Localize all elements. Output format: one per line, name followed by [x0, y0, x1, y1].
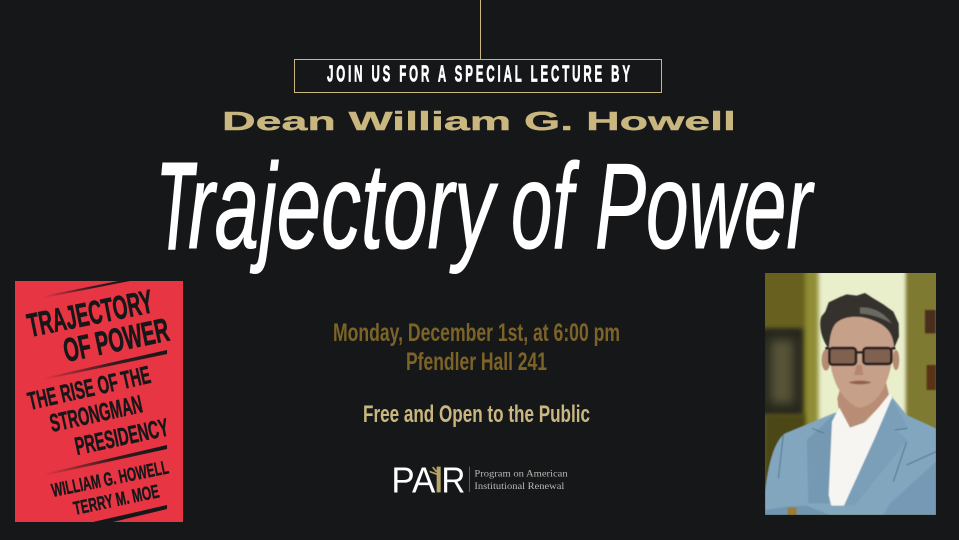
PAIR logo [391, 459, 568, 500]
jacket [765, 397, 936, 515]
PAIR logo: Program on American [474, 469, 568, 479]
book subtitle: THE RISE OF THE [25, 361, 153, 416]
jacket creases [778, 428, 936, 482]
right sleeve [883, 462, 936, 515]
book authors: TERRY M. MOE [72, 481, 161, 520]
connector line [480, 0, 481, 59]
banner: join us [294, 60, 662, 92]
mouth [848, 381, 872, 384]
glasses [825, 348, 895, 365]
book title: OF POWER [60, 311, 172, 369]
title: rajectory [188, 138, 499, 274]
admission note: Free and Open to the Public [363, 401, 590, 428]
book authors [50, 457, 171, 520]
folded arm [765, 506, 830, 515]
book authors: WILLIAM G. HOWELL [50, 457, 171, 502]
banner: join us: JOIN US FOR A SPECIAL LECTURE BY [327, 61, 630, 87]
title: Power [595, 138, 815, 274]
PAIR logo: R [441, 459, 465, 500]
speaker name: Dean William G. Howell [222, 106, 736, 136]
PAIR logo: Institutional Renewal [474, 481, 565, 491]
icon: gold tree [429, 467, 441, 492]
book subtitle [25, 361, 171, 461]
event location: Pfendler Hall 241 [406, 348, 547, 376]
event date and time: Monday, December 1st, at 6:00 pm [333, 319, 620, 347]
book subtitle: STRONGMAN [47, 390, 145, 438]
ears [822, 349, 830, 371]
nose shadow [854, 365, 863, 375]
hair [820, 293, 899, 348]
neck [837, 378, 889, 428]
book rules [43, 281, 167, 522]
lapel [844, 398, 894, 505]
watch [787, 507, 797, 515]
book title [24, 282, 172, 369]
title: of [511, 138, 580, 274]
photo backdrop [760, 268, 940, 515]
book subtitle: PRESIDENCY [72, 414, 171, 461]
title: T [157, 138, 197, 274]
book cover [15, 281, 183, 522]
figure [765, 293, 936, 515]
book title: TRAJECTORY [24, 282, 156, 344]
PAIR logo: PA [391, 459, 435, 500]
face [829, 314, 895, 408]
shirt [829, 393, 893, 506]
speaker portrait [760, 268, 940, 515]
